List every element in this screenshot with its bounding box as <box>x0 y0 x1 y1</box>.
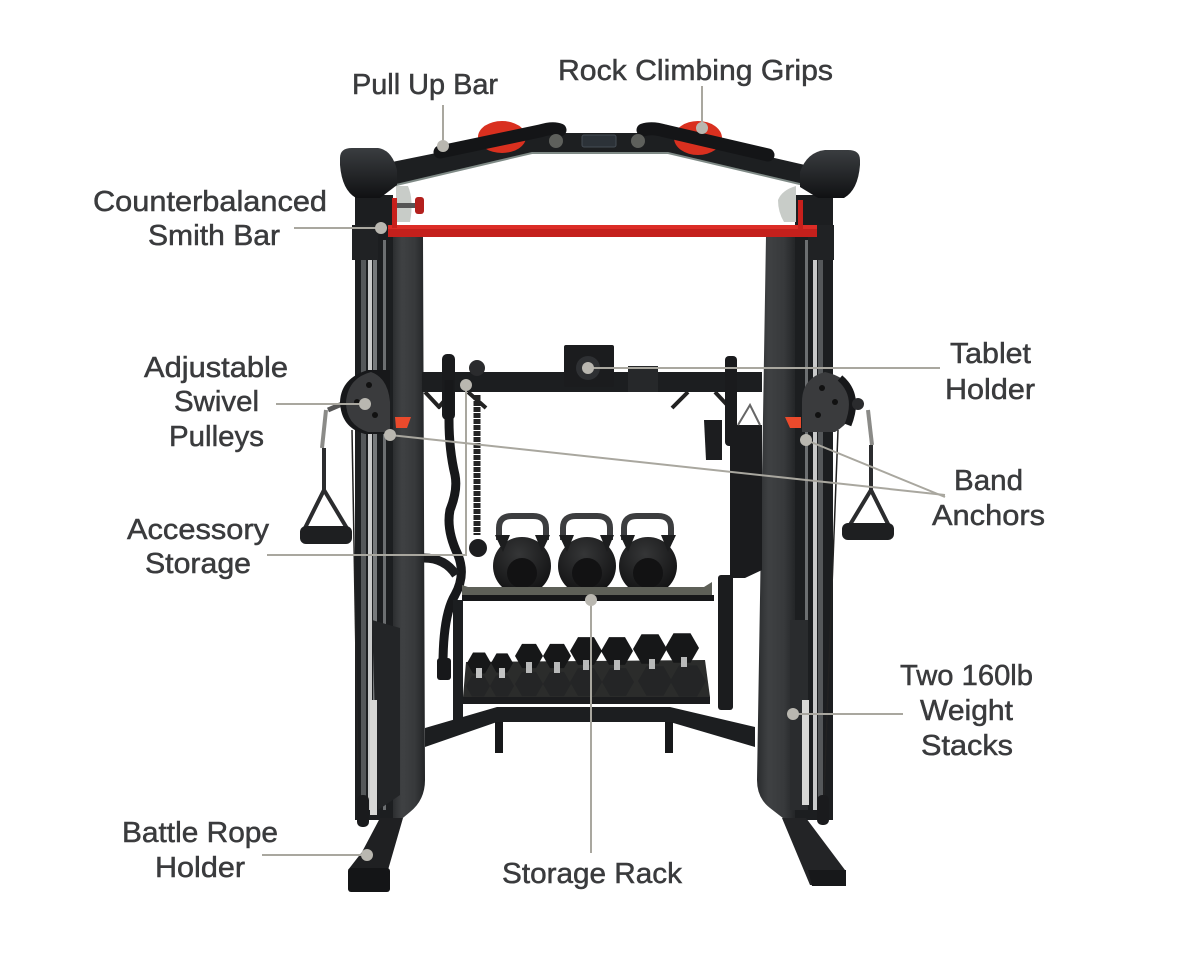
callout: adjustable swivel pulleys <box>144 352 371 453</box>
icon: tablet holder <box>564 345 614 387</box>
callout: counterbalanced smith bar <box>93 186 387 252</box>
accessory: curl bar <box>443 380 461 665</box>
machine: left column <box>352 195 425 827</box>
callout: storage rack: Storage Rack <box>502 858 683 890</box>
accessory: curved storage handle <box>424 558 463 720</box>
callout: counterbalanced smith bar: Smith Bar <box>148 220 280 252</box>
callout: battle rope holder <box>122 817 373 884</box>
callout: tablet holder <box>582 338 1035 406</box>
machine: pull up bar grips <box>440 129 768 155</box>
crossbar with hooks <box>422 354 762 446</box>
callout: band anchors: Anchors <box>932 500 1045 532</box>
cable handle left <box>300 404 358 770</box>
icon: top pulley caps <box>340 148 860 222</box>
callout: two 160lb weight stacks: Stacks <box>921 730 1013 762</box>
icon: right swivel pulley <box>785 372 864 432</box>
callout: accessory storage: Storage <box>145 548 251 580</box>
dumbbell tray <box>463 660 710 697</box>
callout: tablet holder: Holder <box>945 374 1035 406</box>
machine: right column <box>757 195 834 825</box>
icon: red rock climbing grips <box>478 121 722 155</box>
storage shelf <box>462 582 714 601</box>
accessory: straps and hanging belt <box>704 405 762 710</box>
callout: counterbalanced smith bar: Counterbalanced <box>93 186 327 218</box>
callout: adjustable swivel pulleys: Adjustable <box>144 352 288 384</box>
cable handle right <box>824 410 894 795</box>
callout: pull up bar: Pull Up Bar <box>352 69 498 101</box>
red smith bar <box>388 197 817 237</box>
callout: rock climbing grips <box>558 55 833 134</box>
callout: tablet holder: Tablet <box>950 338 1031 370</box>
callout: accessory storage: Accessory <box>127 514 270 546</box>
machine: top frame <box>392 133 808 186</box>
machine: base feet <box>348 818 846 892</box>
callout: adjustable swivel pulleys: Pulleys <box>169 421 264 453</box>
kettlebells <box>493 516 677 595</box>
callout: battle rope holder: Holder <box>155 852 245 884</box>
callout: two 160lb weight stacks <box>787 660 1033 762</box>
callout: band anchors <box>384 429 1045 532</box>
callout: two 160lb weight stacks: Two 160lb <box>900 660 1033 692</box>
callout: rock climbing grips: Rock Climbing Grips <box>558 55 833 87</box>
callout: storage rack <box>502 594 683 890</box>
callout: battle rope holder: Battle Rope <box>122 817 278 849</box>
icon: left swivel pulley <box>340 370 411 434</box>
callout: two 160lb weight stacks: Weight <box>920 695 1013 727</box>
accessory: tricep rope <box>469 395 487 557</box>
callout: band anchors: Band <box>954 465 1023 497</box>
callout: pull up bar <box>352 69 498 152</box>
callout: adjustable swivel pulleys: Swivel <box>174 386 259 418</box>
dumbbell tray front and base <box>425 697 755 753</box>
callout: accessory storage <box>127 379 472 580</box>
dumbbells <box>466 633 706 697</box>
